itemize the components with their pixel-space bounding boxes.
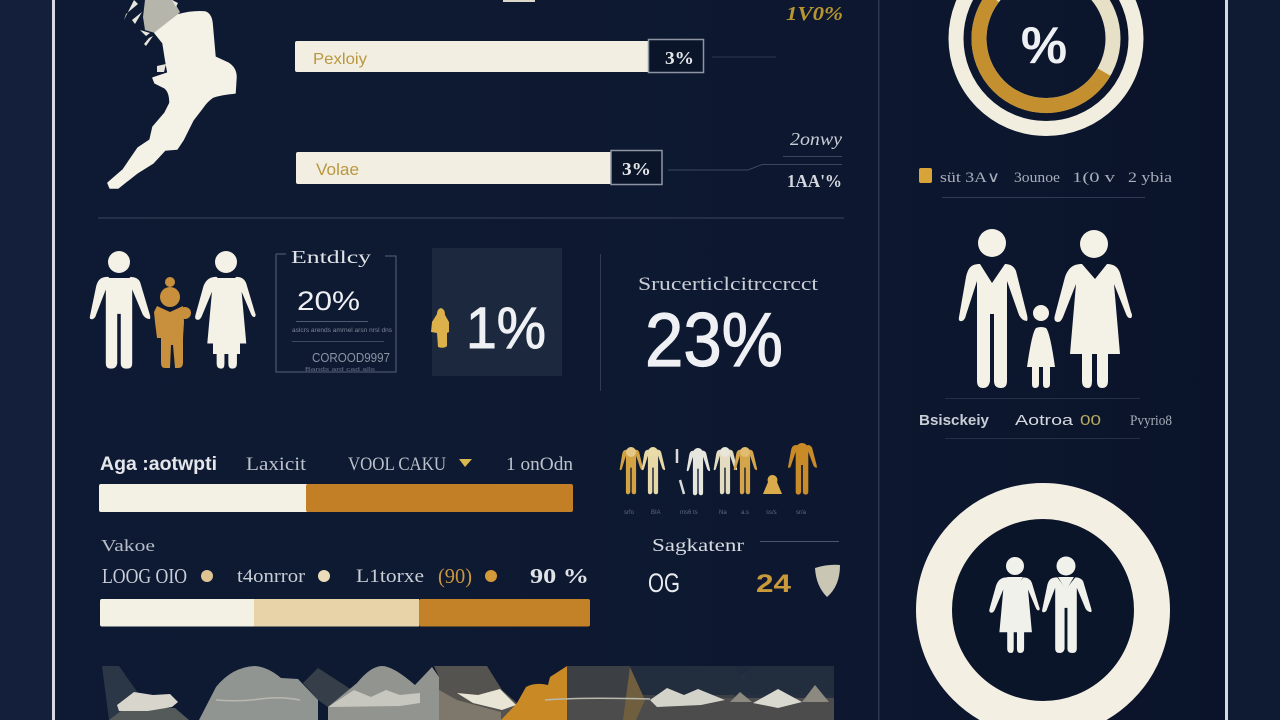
stat: sagkatenr: Sagkatenr: [652, 535, 744, 555]
panel: entrdicy stat: Bands ard cad alls: [305, 367, 376, 373]
panel: entrdicy stat: aslcrs arends amrnel arsn nrsl dns: [292, 328, 392, 334]
stat: sagkatenr: OG: [648, 568, 680, 598]
icon row: small figures: ss/s: [766, 510, 777, 516]
panel: entrdicy stat: 20%: [297, 286, 360, 316]
stacked bar: age: Aga :aotwpti: [100, 454, 217, 475]
legend row: 1(0 v: [1072, 170, 1116, 186]
bar: value: Volae: [316, 160, 359, 179]
bar: value: 3%: [622, 159, 651, 179]
panel: entrdicy stat: Entdlcy: [291, 247, 371, 267]
family labels: Pvyrio8: [1130, 413, 1172, 429]
stacked bar: value: 90 %: [530, 564, 589, 588]
donut chart: percent: [956, 0, 1136, 128]
top value: 1V0%: [786, 3, 843, 25]
stat divider line: [600, 254, 601, 391]
family labels: Bsisckeiy: [919, 412, 990, 429]
side callout values: 1AA'%: [787, 171, 842, 191]
stacked bar: value: t4onrror: [237, 566, 306, 587]
side callout values: [668, 129, 842, 191]
bar: poverty: 3%: [665, 48, 694, 68]
stat: 23 percent: Srucerticlcitrccrcct: [638, 274, 819, 295]
legend row: süt 3A∨: [940, 170, 1000, 186]
panel: entrdicy stat: COROOD9997: [312, 350, 390, 365]
family labels: [919, 398, 1172, 439]
donut: couple icon: [934, 501, 1152, 719]
icon: family left: [90, 251, 256, 369]
stacked bar: age: 1 onOdn: [506, 454, 573, 475]
stacked bar: value: LOOG OIO: [102, 564, 187, 588]
icon row: small figures: [620, 443, 817, 516]
map silhouette: [108, 0, 236, 188]
legend row: 3ounoe: [1014, 170, 1060, 186]
family labels: 00: [1080, 412, 1101, 429]
bar: poverty: Pexloiy: [313, 51, 367, 68]
panel: 1 percent stat: [431, 248, 562, 376]
stat: 23 percent: 23%: [645, 298, 783, 383]
panel: entrdicy stat: [276, 247, 396, 373]
donut chart: percent: %: [1021, 17, 1067, 75]
stacked bar: age: [99, 454, 573, 512]
side callout values: 2onwy: [790, 129, 842, 149]
area chart: [102, 666, 834, 720]
icon row: small figures: a.s: [741, 510, 749, 516]
stacked bar: value: L1torxe: [356, 566, 424, 587]
icon row: small figures: BIA: [651, 510, 661, 516]
stacked bar: value: [100, 536, 590, 626]
stacked bar: age: Laxicit: [246, 454, 307, 475]
legend row: 2 ybia: [1128, 170, 1172, 186]
stacked bar: value: (90): [438, 564, 472, 588]
stat: sagkatenr: [648, 535, 840, 598]
bar: poverty: [295, 40, 776, 72]
icon: family right: [959, 229, 1132, 388]
icon row: small figures: Na: [719, 510, 727, 516]
stacked bar: value: Vakoe: [101, 536, 155, 555]
stacked bar: age: VOOL CAKU: [348, 454, 446, 475]
legend row: [919, 168, 1172, 198]
stat: sagkatenr: 24: [756, 570, 791, 598]
icon row: small figures: srfo: [624, 510, 635, 516]
icon row: small figures: ms6 ts: [680, 510, 698, 516]
panel: 1 percent stat: 1%: [466, 296, 546, 361]
top small box: [503, 0, 535, 2]
stat: 23 percent: [638, 274, 819, 383]
bar: value: [296, 150, 662, 184]
icon row: small figures: sr/a: [796, 510, 807, 516]
family labels: Aotroa: [1015, 412, 1074, 429]
